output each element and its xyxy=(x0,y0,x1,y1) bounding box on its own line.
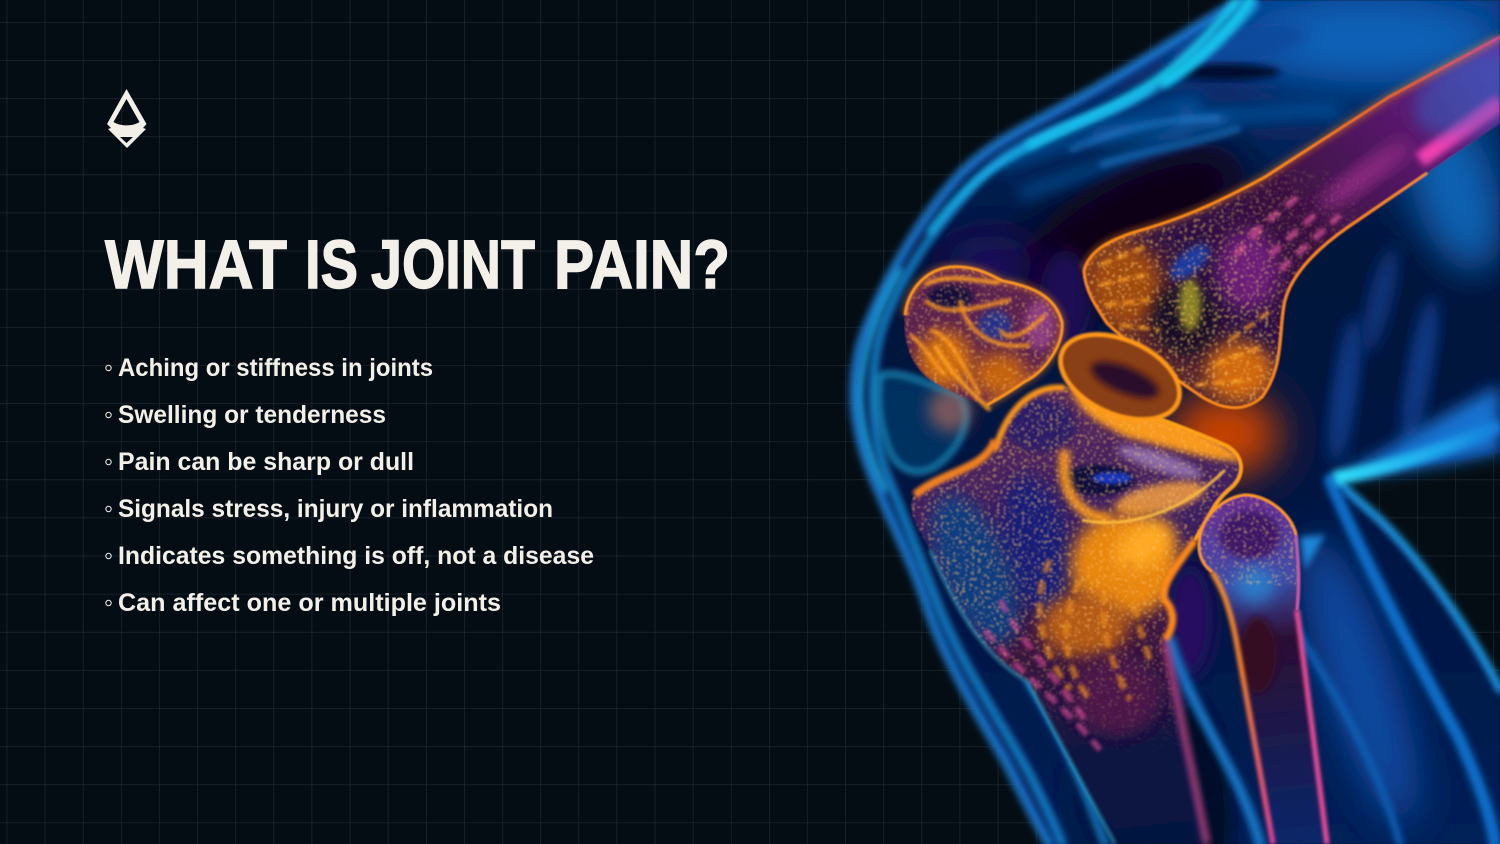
bullet 4: Signals stress, injury or inflammation xyxy=(118,495,553,523)
soft tissue shading xyxy=(945,0,1500,844)
bullet 2: Swelling or tenderness xyxy=(118,401,386,429)
small oval bone xyxy=(1047,318,1193,436)
tibia bone xyxy=(910,380,1244,844)
title xyxy=(105,226,730,303)
title word: PAIN?: PAIN? xyxy=(554,226,730,303)
bullet 6: Can affect one or multiple joints xyxy=(118,589,501,617)
patella bone xyxy=(900,262,1068,410)
knee x-ray illustration xyxy=(854,0,1500,844)
fibula side tissue xyxy=(1300,535,1325,570)
title word: JOINT: JOINT xyxy=(371,226,535,303)
ghost blue kneecap xyxy=(878,373,972,472)
bullet 1: Aching or stiffness in joints xyxy=(118,354,433,382)
logo icon xyxy=(107,89,146,148)
bullet list xyxy=(106,354,594,617)
cyan back-of-knee streak xyxy=(1333,385,1500,478)
glowing outer contour xyxy=(854,0,1500,844)
bullet 3: Pain can be sharp or dull xyxy=(118,448,414,476)
title word: WHAT: WHAT xyxy=(105,226,287,303)
fibula bone xyxy=(1195,495,1327,844)
title word: IS: IS xyxy=(305,226,358,303)
bullet 5: Indicates something is off, not a disease xyxy=(118,542,594,570)
body silhouette xyxy=(854,0,1500,844)
femur bone xyxy=(1070,37,1500,430)
